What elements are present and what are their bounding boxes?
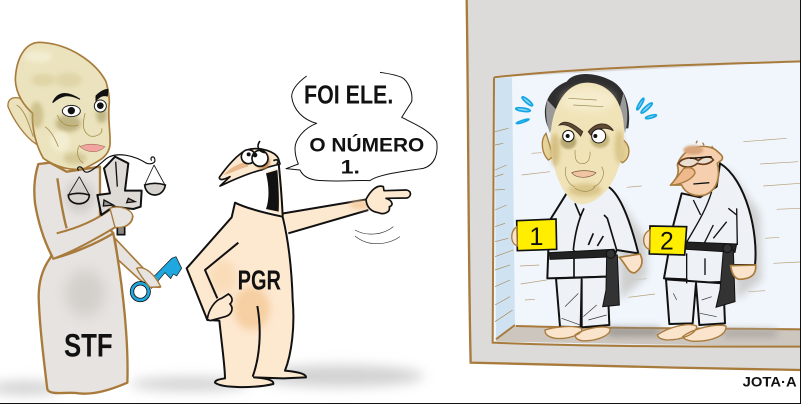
figure: PGR accuser bbox=[187, 72, 437, 387]
ground shadow under left figures bbox=[0, 365, 424, 395]
signature: JOTA·A bbox=[743, 374, 797, 390]
brows bbox=[559, 122, 613, 136]
side wall bbox=[495, 77, 515, 339]
head bbox=[8, 42, 110, 169]
hand on key bbox=[137, 268, 161, 287]
figure shadows bbox=[607, 167, 777, 337]
gi jacket bbox=[547, 187, 638, 278]
figure: suspect 2 bbox=[644, 141, 756, 341]
eyes bbox=[62, 105, 80, 117]
placard 2 bbox=[649, 226, 687, 255]
label: STF: STF bbox=[64, 328, 113, 364]
hair tufts bbox=[696, 141, 713, 148]
gi jacket bbox=[664, 163, 756, 283]
fist on hip bbox=[207, 294, 232, 321]
face wrinkles bbox=[45, 113, 102, 163]
feet bbox=[657, 325, 726, 341]
feet bbox=[545, 327, 610, 341]
side wall brick lines bbox=[495, 128, 513, 322]
figure: suspect 1 bbox=[512, 74, 657, 341]
head bbox=[219, 149, 280, 186]
mouth bbox=[693, 183, 709, 184]
upper robe bbox=[34, 163, 113, 259]
wall frame bbox=[467, 0, 801, 370]
trousers bbox=[666, 279, 725, 325]
trousers bbox=[556, 277, 609, 327]
jacket folds bbox=[686, 192, 737, 283]
icon: key bbox=[132, 257, 182, 300]
floor bbox=[495, 326, 801, 347]
back wall brick lines bbox=[520, 138, 800, 300]
figure: suspect 2: 2 bbox=[660, 228, 674, 255]
mouth bbox=[572, 171, 596, 177]
glasses and brow bbox=[678, 157, 713, 167]
left pan bbox=[68, 177, 89, 195]
speech bubble bbox=[286, 72, 437, 181]
right hand bbox=[731, 265, 756, 279]
robe shading bbox=[65, 270, 105, 317]
leg and arm lines bbox=[205, 243, 260, 377]
icon: sweat marks bbox=[516, 96, 657, 124]
scale beam bbox=[78, 155, 155, 172]
nose bbox=[671, 168, 695, 185]
skull and face bbox=[15, 42, 110, 169]
placard 1 bbox=[517, 219, 557, 251]
robe bbox=[39, 230, 128, 394]
pointing arm bbox=[283, 198, 368, 233]
ear bbox=[8, 98, 42, 144]
figure: STF judge bbox=[8, 42, 182, 394]
robe seam bbox=[57, 178, 67, 228]
wrinkles bbox=[565, 98, 603, 191]
face bbox=[551, 83, 624, 204]
panel: line-up room bbox=[467, 0, 801, 390]
ears bbox=[542, 133, 629, 163]
window bbox=[493, 61, 801, 347]
body bbox=[187, 203, 306, 387]
open mouth and neck bbox=[266, 168, 283, 216]
mouth bbox=[80, 144, 105, 152]
speech text: FOI ELE. bbox=[304, 79, 393, 109]
figure: suspect 1: 1 bbox=[529, 223, 543, 251]
brows bbox=[53, 89, 108, 103]
speech text: O NÚMERO bbox=[309, 132, 424, 156]
label: PGR: PGR bbox=[238, 264, 281, 295]
belt bbox=[549, 249, 617, 259]
eyes and hair bbox=[255, 154, 270, 169]
head hair bbox=[545, 74, 629, 130]
body shading bbox=[233, 287, 270, 330]
jacket folds bbox=[573, 203, 617, 278]
motion lines bbox=[355, 227, 400, 244]
speech text bbox=[304, 79, 424, 178]
hand on sword bbox=[110, 207, 133, 228]
eyes bbox=[563, 130, 574, 142]
right hand bbox=[619, 254, 642, 273]
holding arm bbox=[53, 208, 133, 259]
pointing hand bbox=[366, 186, 410, 214]
sword bbox=[97, 157, 142, 215]
speech text: 1. bbox=[341, 157, 360, 178]
belt bbox=[686, 242, 737, 252]
far arm bbox=[115, 238, 160, 287]
right pan bbox=[145, 165, 165, 185]
head bbox=[671, 146, 723, 196]
